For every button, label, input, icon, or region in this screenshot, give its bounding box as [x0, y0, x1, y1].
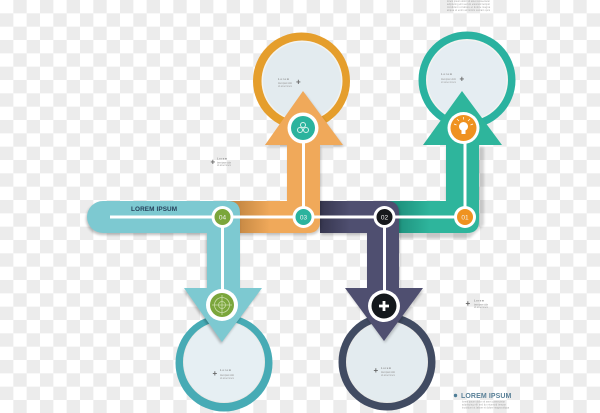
text block: teal ring note: + [460, 74, 464, 84]
text block: orange ring note: + [296, 78, 301, 86]
text block: slate ring note [374, 366, 395, 377]
node 03: 03 [300, 214, 307, 222]
text block: top fragment: aliqua ut enim ad minim veniam quis [447, 9, 491, 12]
text block: top fragment: incididunt ut labore et dolore magna [447, 6, 491, 9]
text block: blue ring note: Lorem [220, 368, 232, 372]
text block: teal ring note: lorem ipsum dolor [441, 78, 456, 81]
text block: slate ring note: + [374, 366, 378, 375]
text block: slate ring note: lorem ipsum dolor [381, 371, 395, 374]
icon: target on green badge [206, 289, 238, 321]
text block: side note middle left: lorem ipsum dolor [217, 162, 231, 164]
node 04: 04 [219, 214, 226, 222]
panel: orange ring top [253, 32, 350, 130]
text block: bottom right lorem ipsum: LOREM IPSUM [461, 393, 512, 400]
text block: blue ring note: sit amet lorem [220, 377, 234, 380]
node 04 [212, 206, 234, 228]
node 03 [292, 206, 314, 228]
arrow: light blue step 04 pointing down [86, 201, 262, 344]
text block: orange ring note: Lorem [278, 77, 290, 81]
text block: side note lower right: lorem ipsum dolor [474, 304, 488, 306]
arrow: orange step 03 pointing up [225, 91, 344, 235]
node 01 [454, 206, 476, 228]
arrow: teal step 01 pointing up [380, 91, 504, 238]
node 01: 01 [461, 214, 469, 222]
panel: light blue ring bottom [176, 314, 272, 412]
text block: blue ring note [212, 368, 234, 380]
text block: side note middle left: Lorem [217, 156, 228, 160]
icon: plus on dark badge [368, 290, 400, 322]
node 02: 02 [381, 214, 388, 222]
node 02 [374, 206, 396, 228]
icon: cog cluster on teal badge [288, 112, 318, 144]
text block: bottom right lorem ipsum: adipiscing elit sed do eiusmod tempor [462, 404, 506, 406]
text block: slate ring note: Lorem [381, 366, 392, 370]
text block: teal ring note [441, 72, 464, 84]
arrow: slate step 02 pointing down [320, 201, 424, 343]
text block: side note lower right: sit amet lorem [474, 306, 488, 309]
text block: top fragment [447, 0, 491, 12]
text block: top fragment: lorem ipsum dolor sit amet consectetur [447, 0, 490, 3]
text block: side note lower right: Lorem [474, 298, 485, 302]
text block: side note middle left [210, 156, 231, 167]
heading: lorem ipsum on bar: LOREM IPSUM [131, 206, 177, 213]
text block: blue ring note: lorem ipsum dolor [220, 374, 234, 377]
icon: light bulb on orange badge [448, 112, 480, 144]
text block: top fragment: adipiscing elit sed do eiusmod tempor [447, 3, 490, 6]
text block: orange ring note [278, 77, 301, 88]
panel: slate ring bottom [338, 314, 436, 410]
text block: bottom right lorem ipsum: incididunt ut labore et dolore magna aliqua [462, 406, 510, 410]
connector lines [110, 130, 466, 302]
text block: teal ring note: Lorem [441, 72, 453, 76]
text block: side note lower right [466, 298, 488, 309]
text block: bottom right lorem ipsum [454, 393, 512, 410]
text block: teal ring note: sit amet lorem [441, 81, 456, 84]
text block: orange ring note: lorem ipsum dolor [278, 82, 292, 85]
text block: blue ring note: + [212, 369, 218, 378]
text block: side note middle left: sit amet lorem [217, 164, 231, 167]
text block: side note middle left: + [210, 158, 216, 166]
text block: orange ring note: sit amet lorem [278, 85, 292, 88]
panel: teal ring top [418, 32, 516, 128]
text block: bottom right lorem ipsum: lorem ipsum dolor sit amet consectetur [462, 400, 505, 404]
text block: slate ring note: sit amet lorem [381, 374, 395, 377]
text block: side note lower right: + [466, 299, 470, 308]
